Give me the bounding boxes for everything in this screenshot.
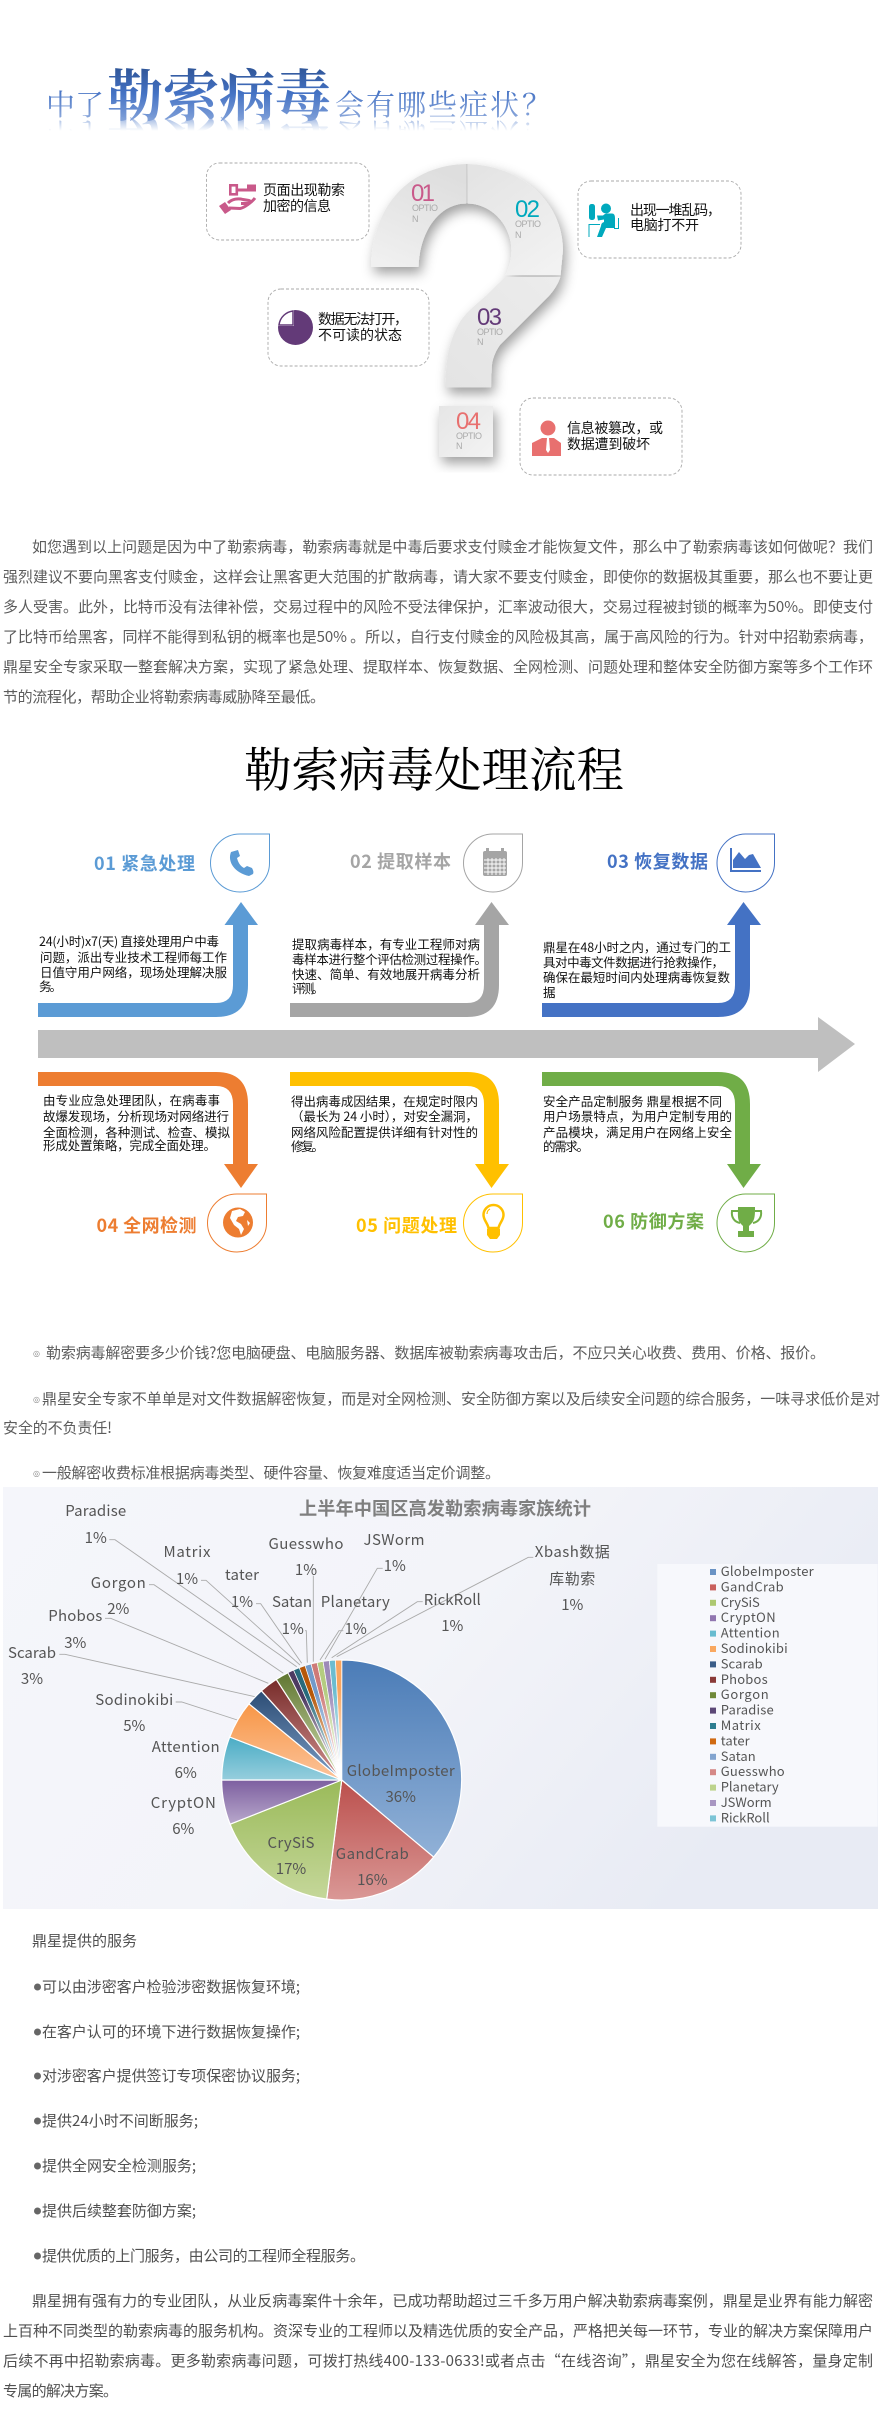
segment 02 label: 02 (515, 196, 540, 223)
segment 04 (439, 406, 493, 457)
step text (39, 931, 227, 995)
step 06 defense plan: 06 防御方案 (603, 1208, 704, 1234)
callout: encrypted info page: 加密的信息 (263, 196, 331, 216)
arrow down (290, 1072, 509, 1188)
arrow down (38, 1072, 258, 1188)
chart title: 上半年中国区高发勒索病毒家族统计 (299, 1495, 591, 1521)
pie labels: 3% (21, 1668, 43, 1689)
text block: intro paragraph: 强烈建议不要向黑客支付赎金，这样会让黑客更大范围的扩散病毒，请大家不要支付赎金，即使你的数据极其重要，那么也不要让更 (3, 566, 873, 587)
step text: 据。 (543, 982, 563, 1001)
icon: hand holding key (219, 184, 256, 214)
pie labels: JSWorm (364, 1529, 424, 1550)
text block: intro paragraph: 了比特币给黑客，同样不能得到私钥的概率也是50% 。所以，自行支付赎金的风险极其高，属于高风险的行为。针对中招勒索病毒， (3, 626, 873, 647)
step text: 安全产品定制服务 鼎星根据不同 (543, 1091, 722, 1110)
text block: services list: 在客户认可的环境下进行数据恢复操作; (42, 2021, 300, 2042)
pie labels: Planetary (321, 1591, 390, 1612)
callout: garbled screen: 出现一堆乱码， (630, 200, 721, 220)
text block: pricing notes: 鼎星安全专家不单单是对文件数据解密恢复，而是对全网检测、安全防御方案以及后续安全问题的综合服务，一味寻求低价是对 (42, 1388, 880, 1409)
pie labels: 1% (176, 1568, 198, 1589)
step text: 提取病毒样本，有专业工程师对病 (292, 934, 480, 953)
legend: Matrix (721, 1715, 761, 1734)
callout: tampered information (520, 398, 682, 475)
pie labels: Sodinokibi (95, 1689, 173, 1710)
step text: 修复。 (291, 1136, 324, 1155)
step text (43, 1090, 230, 1154)
pie labels: tater (225, 1564, 259, 1585)
pie labels: Attention (152, 1736, 220, 1757)
legend: Phobos (721, 1669, 768, 1688)
segment 04: 04 (456, 408, 481, 435)
pie labels: Matrix (164, 1541, 211, 1562)
title: symptoms heading: ？ (522, 114, 551, 155)
legend: Satan (721, 1746, 756, 1765)
step text: 务。 (39, 976, 62, 995)
text block: pricing notes: ◎ (33, 1349, 40, 1358)
text block: services list: 提供后续整套防御方案; (42, 2200, 196, 2221)
pie labels: Satan (272, 1591, 312, 1612)
segment 03 label: 03 (477, 304, 502, 331)
step text: 确保在最短时间内处理病毒恢复数 (543, 967, 730, 986)
title: symptoms heading: 中 (46, 83, 75, 124)
text block: services list: 提供优质的上门服务，由公司的工程师全程服务。 (42, 2245, 365, 2266)
title: symptoms heading: 勒索病毒 (107, 105, 331, 185)
pie labels: 36% (385, 1786, 416, 1807)
pie labels (8, 1500, 610, 1890)
step text: 鼎星在48小时之内，通过专门的工 (543, 937, 731, 956)
step text: 产品模块，满足用户在网络上安全 (543, 1122, 732, 1141)
question mark shape (371, 164, 563, 388)
icon: person at computer (589, 204, 618, 237)
step 06 defense plan (542, 1072, 774, 1252)
arrow down (542, 1072, 761, 1188)
text block: closing paragraph: 上百种不同类型的勒索病毒的服务机构。资深专业的工程师以及精选优质的安全产品，严格把关每一环节，专业的解决方案保障用户 (3, 2320, 873, 2341)
step text: 问题，派出专业技术工程师每工作 (40, 947, 227, 966)
title: symptoms heading: 了 (75, 83, 104, 124)
step 01 emergency handling: 01 紧急处理 (94, 850, 195, 876)
pie slices (222, 1660, 462, 1900)
step text: 得出病毒成因结果，在规定时限内 (291, 1091, 478, 1110)
step text: 由专业应急处理团队，在病毒事 (43, 1090, 220, 1109)
text block: services list: 提供全网安全检测服务; (42, 2155, 196, 2176)
legend (657, 1561, 878, 1827)
callout: garbled screen (578, 181, 741, 258)
callout: data cannot be opened: 不可读的状态 (318, 325, 402, 345)
pie labels: 16% (357, 1869, 388, 1890)
callout: encrypted info page (206, 163, 369, 240)
arrow: main timeline (38, 1017, 855, 1072)
text block: intro paragraph: 多人受害。此外，比特币没有法律补偿，交易过程中的风险不受法律保护，汇率波动很大，交易过程被封锁的概率为50%。即使支付 (3, 596, 873, 617)
arrow up (542, 902, 761, 1017)
pie labels: 库勒索 (549, 1568, 595, 1589)
title: symptoms heading (46, 53, 551, 185)
text block: services list: 鼎星提供的服务 (32, 1930, 137, 1951)
legend: Scarab (721, 1653, 763, 1672)
text block: pricing notes: 勒索病毒解密要多少价钱?您电脑硬盘、电脑服务器、数据库被勒索病毒攻击后，不应只关心收费、费用、价格、报价。 (46, 1342, 825, 1363)
pie labels: Phobos (48, 1605, 102, 1626)
callout: encrypted info page: 页面出现勒索 (263, 180, 345, 200)
step text: 24(小时)x7(天) 直接处理用户中毒 (39, 931, 219, 950)
legend: Guesswho (721, 1761, 785, 1780)
title: symptoms heading: 中 (46, 114, 75, 155)
step 03 data recovery: 03 恢复数据 (607, 848, 708, 874)
step text (291, 1091, 478, 1155)
step icon: trophy in drop (717, 1194, 774, 1252)
icon: person (532, 420, 561, 456)
step text: 快速、简单、有效地展开病毒分析 (292, 964, 480, 983)
pie labels: 17% (276, 1858, 306, 1879)
question mark graphic (371, 164, 563, 457)
pie labels: 1% (231, 1591, 253, 1612)
callout: garbled screen: 电脑打不开 (630, 215, 699, 235)
legend: Sodinokibi (721, 1638, 788, 1657)
segment 02 label: N (515, 230, 522, 240)
pie labels: 1% (85, 1527, 107, 1548)
text block: services list: 对涉密客户提供签订专项保密协议服务; (42, 2065, 300, 2086)
text block: closing paragraph: 后续不再中招勒索病毒。更多勒索病毒问题，可拨打热线400-133-0633!或者点击“在线咨询”，鼎星安全为您在线解答，量身定制 (3, 2350, 873, 2371)
step text: 评测。 (292, 978, 324, 997)
segment 01 label: 01 (411, 180, 435, 207)
legend: CrySiS (721, 1592, 760, 1611)
text block: pricing notes: ◎ (33, 1395, 40, 1404)
legend: tater (721, 1730, 751, 1749)
legend: RickRoll (721, 1807, 770, 1826)
step text: （最长为 24 小时），对安全漏洞， (291, 1106, 478, 1125)
step text: 形成处置策略，完成全面处理。 (43, 1135, 216, 1154)
segment 04: N (456, 441, 462, 451)
text block: intro paragraph: 鼎星安全专家采取一整套解决方案，实现了紧急处理、提取样本、恢复数据、全网检测、问题处理和整体安全防御方案等多个工作环 (3, 656, 873, 677)
step text (543, 937, 731, 1001)
title: symptoms heading: 了 (75, 114, 104, 155)
title: symptoms heading: 会有哪些症状 (335, 114, 519, 155)
step text: 的需求。 (543, 1136, 589, 1155)
arrow up (290, 902, 509, 1017)
callout: data cannot be opened: 数据无法打开， (318, 309, 408, 329)
step 01 emergency handling (38, 834, 270, 1017)
segment 01 label: OPTIO (412, 203, 438, 213)
pie labels: 2% (107, 1598, 130, 1619)
pie labels: 1% (384, 1555, 406, 1576)
pie labels: Paradise (65, 1500, 126, 1521)
text block: pricing notes: ◎ (33, 1469, 40, 1478)
pie labels: GandCrab (336, 1843, 409, 1864)
callout: tampered information: 数据遭到破坏 (567, 434, 650, 454)
pie labels: 1% (345, 1618, 367, 1639)
text block: services list (32, 1930, 365, 2266)
step text: 用户场景特点，为用户定制专用的 (543, 1106, 732, 1125)
segment 03 label: N (477, 337, 484, 347)
step icon: globe in drop (208, 1194, 266, 1252)
text block: intro paragraph (3, 536, 873, 707)
legend: JSWorm (721, 1792, 772, 1811)
text block: intro paragraph: 如您遇到以上问题是因为中了勒索病毒，勒索病毒就是中毒后要求支付赎金才能恢复文件，那么中了勒索病毒该如何做呢？我们 (32, 536, 873, 557)
legend: Attention (721, 1623, 780, 1642)
pie labels: RickRoll (424, 1589, 481, 1610)
step 05 issue handling: 05 问题处理 (356, 1212, 457, 1238)
segment 01 label: N (412, 214, 418, 224)
step icon: calendar in drop (464, 834, 522, 892)
step text: 具对中毒文件数据进行抢救操作， (543, 952, 724, 971)
pie labels: GlobeImposter (347, 1760, 455, 1781)
step text: 故爆发现场，分析现场对网络进行 (43, 1106, 229, 1125)
pie labels: 3% (64, 1632, 87, 1653)
text block: closing paragraph: 专属的解决方案。 (3, 2380, 118, 2401)
panel: pie chart (3, 1487, 878, 1909)
callout: tampered information: 信息被篡改，或 (567, 418, 663, 438)
callout: data cannot be opened (268, 289, 429, 366)
segment 02 label (515, 196, 541, 240)
pie labels: 6% (175, 1762, 197, 1783)
title: symptoms heading: 会有哪些症状 (335, 83, 519, 124)
pie labels: 1% (282, 1618, 304, 1639)
segment 03 label: OPTIO (477, 327, 503, 337)
pie labels: Guesswho (268, 1533, 344, 1554)
step text: 日值守用户网络，现场处理解决服 (40, 962, 227, 981)
segment 01 label (411, 180, 438, 224)
pie labels: 1% (441, 1615, 464, 1636)
pie labels: 5% (123, 1715, 146, 1736)
step icon: phone in drop (210, 834, 270, 892)
text block: intro paragraph: 节的流程化，帮助企业将勒索病毒威胁降至最低。 (3, 686, 325, 707)
step text (543, 1091, 732, 1155)
pie labels: Scarab (8, 1642, 56, 1663)
text block: closing paragraph: 鼎星拥有强有力的专业团队，从业反病毒案件十余年，已成功帮助超过三千多万用户解决勒索病毒案例，鼎星是业界有能力解密 (32, 2290, 873, 2311)
title: symptoms heading: 勒索病毒 (107, 53, 331, 133)
legend: GlobeImposter (721, 1561, 815, 1580)
step 02 sample extraction: 02 提取样本 (350, 848, 451, 874)
heading: process title: 勒索病毒处理流程 (244, 732, 624, 801)
pie labels: CryptON (151, 1792, 216, 1813)
legend: GandCrab (721, 1576, 784, 1595)
legend: CryptON (721, 1607, 776, 1626)
step text: 毒样本进行整个评估检测过程操作。 (292, 949, 487, 968)
step 02 sample extraction (290, 834, 522, 1017)
text block: services list: 提供24小时不间断服务; (42, 2110, 198, 2131)
pie labels: 6% (172, 1818, 195, 1839)
step text: 全面检测，各种测试、检查、模拟 (43, 1122, 230, 1141)
legend: Gorgon (721, 1684, 769, 1703)
legend: Paradise (721, 1700, 774, 1719)
pie labels: 1% (295, 1559, 317, 1580)
title: symptoms heading: ？ (522, 83, 551, 124)
step 03 data recovery (542, 834, 774, 1017)
pie labels: Xbash数据 (535, 1541, 610, 1562)
legend: Planetary (721, 1777, 779, 1796)
text block: closing paragraph (3, 2290, 873, 2401)
step icon: area chart in drop (717, 834, 774, 892)
leader lines (59, 1540, 533, 1720)
segment 04: OPTIO (456, 431, 482, 441)
step text (292, 934, 487, 997)
step icon: light bulb in drop (464, 1194, 522, 1252)
step text: 网络风险配置提供详细有针对性的 (291, 1122, 478, 1141)
segment 03 label (477, 304, 503, 347)
segment 02 label: OPTIO (515, 219, 541, 229)
step 04 network detection (38, 1072, 266, 1252)
pie labels: CrySiS (268, 1832, 315, 1853)
step 05 issue handling (290, 1072, 522, 1252)
pie labels: 1% (561, 1594, 584, 1615)
text block: pricing notes: 安全的不负责任! (3, 1417, 112, 1438)
icon: pie (278, 310, 313, 345)
step 04 network detection: 04 全网检测 (96, 1212, 196, 1238)
text block: pricing notes: 一般解密收费标准根据病毒类型、硬件容量、恢复难度适当定价调整。 (42, 1462, 500, 1483)
pie labels: Gorgon (91, 1572, 146, 1593)
arrow up (38, 902, 258, 1017)
text block: services list: 可以由涉密客户检验涉密数据恢复环境; (42, 1976, 300, 1997)
text block: pricing notes (3, 1342, 880, 1483)
